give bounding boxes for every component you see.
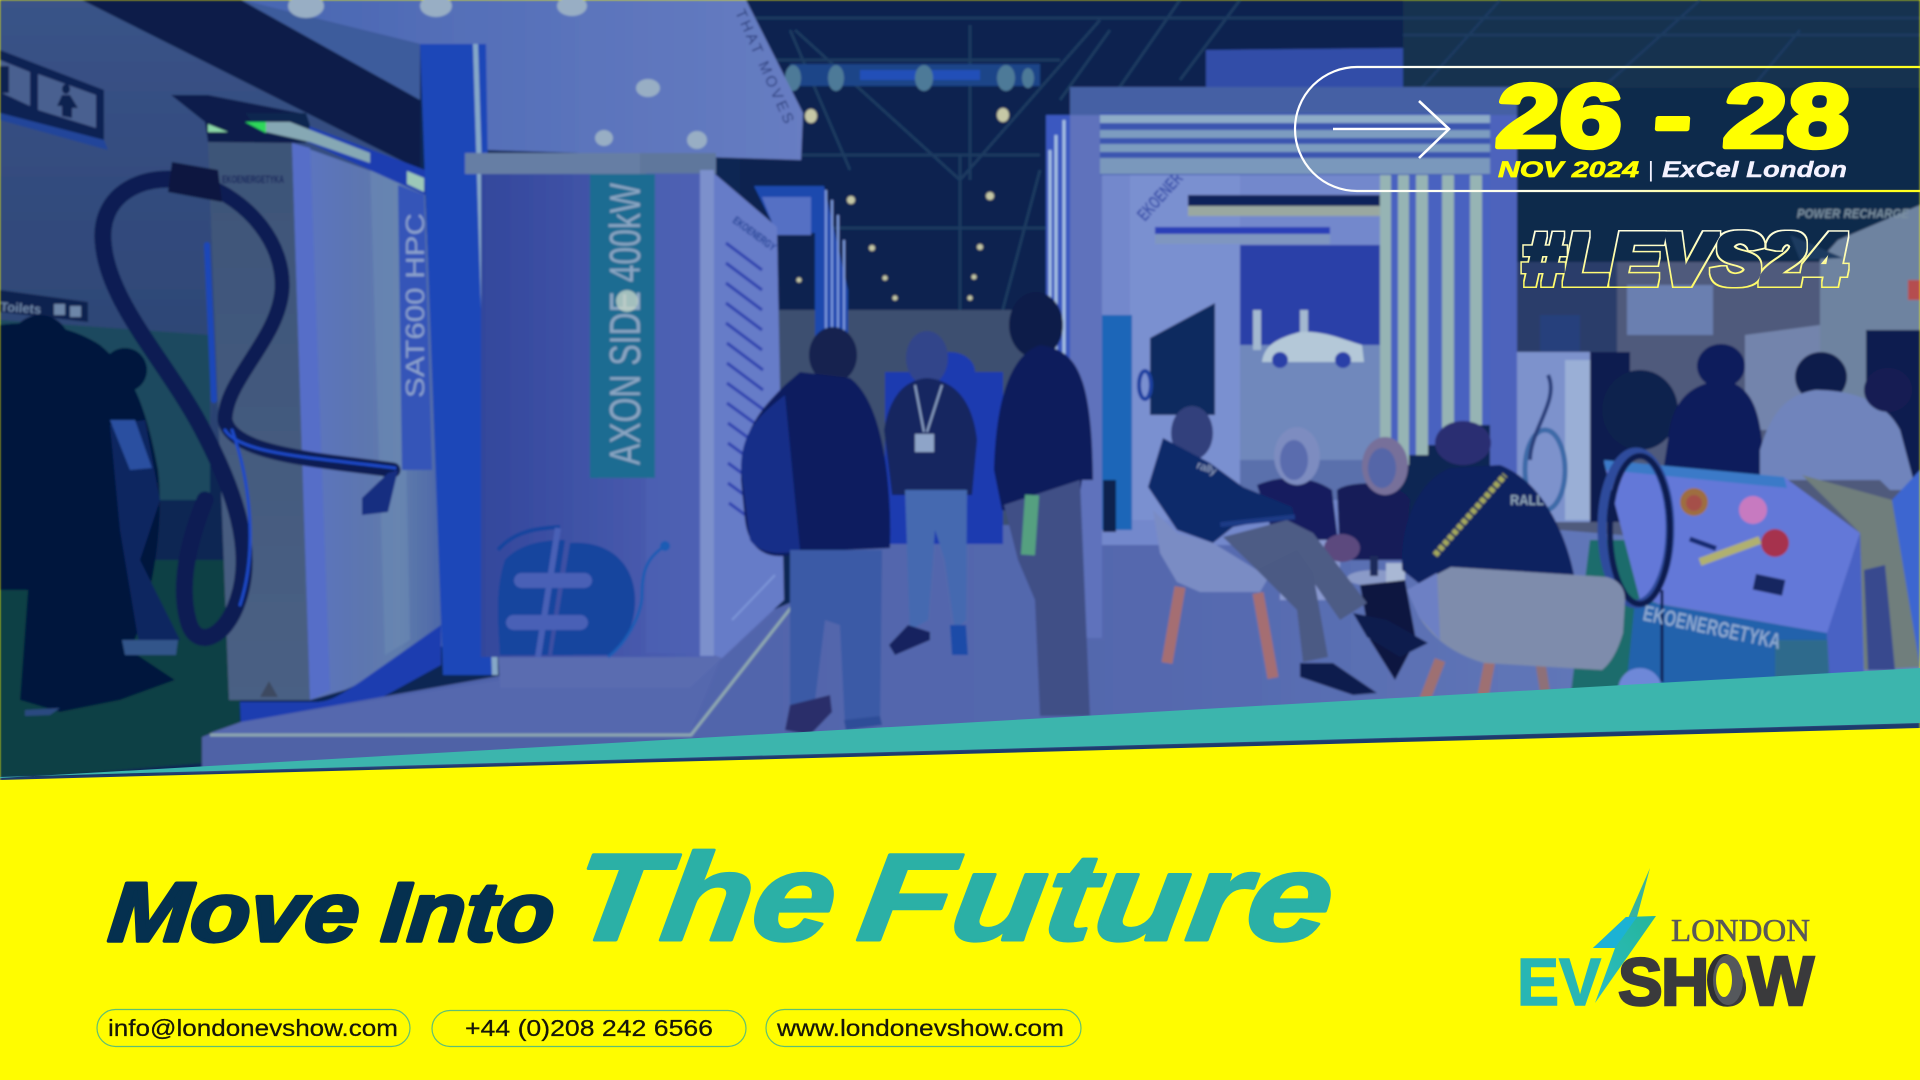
logo word show: W — [1748, 942, 1814, 1020]
seated legs background — [1360, 580, 1416, 680]
canopy — [241, 0, 803, 160]
contact pill: phone: +44 (0)208 242 6566 — [465, 1015, 713, 1041]
plug logo — [498, 527, 670, 657]
woman one — [1257, 427, 1340, 600]
dark soffit — [82, 0, 420, 170]
hashtag: #LEVS24 — [1522, 220, 1847, 300]
panel: event photo — [0, 0, 1920, 800]
left foreground visitors — [0, 315, 180, 716]
dark sliver below banner — [0, 722, 1920, 782]
woman with lanyard seated back — [1402, 421, 1574, 600]
contact pill: website — [766, 1010, 1081, 1046]
axon sign — [590, 174, 655, 478]
contact pill: website: www.londonevshow.com — [776, 1015, 1064, 1041]
stage platform — [0, 525, 1920, 780]
logo: london ev show — [1517, 868, 1814, 1020]
led floor line — [210, 600, 797, 735]
logo word london: LONDON — [1671, 912, 1810, 948]
booth frame — [1046, 48, 1517, 638]
headline: move into: Move — [105, 865, 364, 959]
back wall green signage — [0, 320, 210, 500]
far hall wall — [775, 310, 1105, 540]
seated group — [1148, 406, 1625, 712]
ceiling trusses and lights — [740, 0, 1920, 340]
hall charger — [1515, 352, 1630, 522]
machine wheel — [1618, 668, 1662, 712]
vertical led slats — [1380, 175, 1482, 475]
warning triangle — [260, 681, 278, 697]
logo word show: H — [1661, 945, 1709, 1020]
axon sign: AXON SIDE 400kW — [601, 183, 650, 465]
armchair one — [1153, 510, 1267, 592]
man in chair — [1148, 406, 1428, 695]
canopy spot lights — [288, 0, 707, 149]
headline: the future — [564, 829, 1343, 967]
green carpet right — [1570, 540, 1660, 710]
charging connector — [362, 470, 398, 515]
tv screen — [1150, 303, 1215, 415]
canopy edge text: THAT MOVES — [731, 7, 798, 129]
person: centre visitor — [884, 331, 977, 655]
charging cable — [103, 179, 395, 637]
person: grey sweater — [1760, 352, 1916, 500]
brand label: EKOENERGY — [730, 215, 778, 254]
person: backpack visitor — [741, 327, 890, 735]
right side exhibition hall — [1500, 88, 1920, 562]
hanging light bars — [1155, 195, 1390, 244]
logo word ev: EV — [1517, 945, 1601, 1020]
axon cabinet — [465, 153, 784, 658]
person: navy suit — [1660, 344, 1765, 490]
side table and cup — [1347, 556, 1405, 586]
woman with lanyard seated back: RALL — [1510, 492, 1544, 509]
contact pill: email: info@londonevshow.com — [108, 1015, 398, 1041]
venue: ExCel London — [1662, 157, 1847, 182]
man in chair: rally — [1195, 460, 1219, 478]
teal diagonal ribbon — [0, 668, 1920, 778]
charger overhead light bar — [171, 95, 425, 195]
sat600 sign — [398, 185, 432, 470]
machine brand text: EKOENERGETYKA — [1641, 600, 1783, 654]
left wall — [0, 0, 420, 450]
booth columns — [1070, 88, 1102, 638]
machine cable loop — [1602, 452, 1670, 604]
arrow — [1333, 101, 1449, 158]
person: standing man — [994, 292, 1093, 716]
headline: move into: Into — [378, 865, 559, 959]
contact pill: email — [97, 1010, 410, 1046]
yellow footer band — [0, 728, 1920, 1080]
contact pill: phone — [432, 1010, 746, 1046]
carpet — [0, 560, 240, 780]
brand mark: EKOENERGETYKA — [222, 174, 284, 186]
cabinet plinth step — [498, 640, 742, 688]
event dates: 26 - 28 — [1493, 66, 1854, 167]
wall brand: EKOENER — [1133, 168, 1187, 225]
blue stand in distance — [754, 186, 848, 345]
upper wall beside soffit — [241, 0, 420, 100]
cable clamp — [168, 162, 222, 202]
charger kiosk: SAT600 HPC — [400, 213, 430, 398]
charger kiosk — [208, 140, 445, 726]
logo word show: S — [1618, 945, 1663, 1020]
logo lightning bolt — [1593, 868, 1656, 1003]
horizontal led slats — [1100, 113, 1490, 175]
wall graphic — [1240, 245, 1380, 500]
backdrop people centre — [885, 352, 1003, 544]
toilets direction sign: Toilets — [0, 299, 42, 317]
control machine — [1602, 452, 1920, 712]
logo tyre — [1707, 954, 1743, 1006]
armchair two — [1407, 567, 1625, 712]
date pill outline — [1295, 67, 1920, 191]
headline: move into — [105, 865, 559, 959]
control buttons — [1680, 488, 1708, 516]
month and year: NOV 2024 — [1498, 157, 1639, 182]
woman two — [1324, 437, 1410, 562]
cabinet louvres — [726, 243, 766, 530]
kiosk base — [240, 625, 441, 726]
logo word show: O — [1708, 960, 1747, 1016]
hall crowd — [1602, 370, 1678, 450]
restroom sign — [0, 50, 108, 150]
toilets direction sign — [0, 290, 88, 322]
separator: | — [1648, 157, 1654, 182]
booth back wall — [1100, 175, 1390, 545]
blue column — [420, 44, 496, 675]
headline: the future: The — [564, 829, 846, 967]
headline: the future: Future — [851, 829, 1343, 967]
